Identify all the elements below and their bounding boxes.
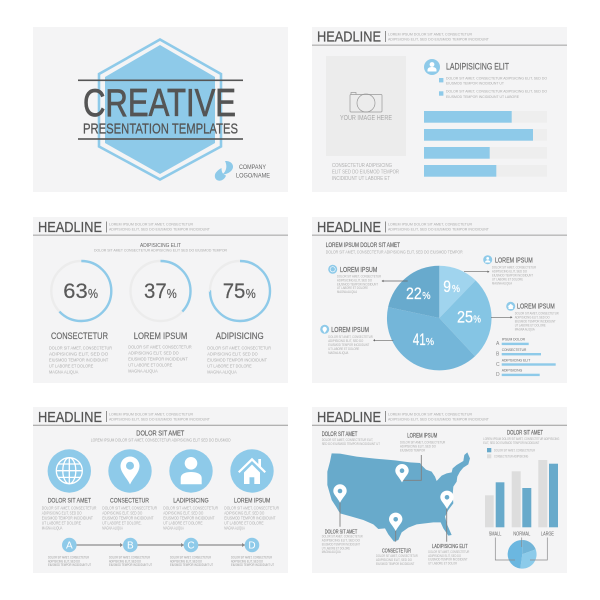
map pins: [333, 464, 454, 531]
header: [312, 219, 567, 236]
ring: 37 percent: [130, 261, 190, 321]
pie chart: %: [473, 314, 481, 326]
ring descriptions: MAGNA ALIQUA: [128, 368, 158, 374]
pie connector lines: [495, 538, 547, 560]
bar chart: [424, 111, 547, 177]
mini bar chart: B: [496, 352, 500, 358]
ring descriptions: MAGNA ALIQUA: [207, 370, 237, 374]
icon: camera: [350, 92, 382, 112]
column descriptions: EIUSMOD TEMPOR INCIDIDUNT: [102, 516, 154, 520]
column descriptions: EIUSMOD TEMPOR INCIDIDUNT: [42, 516, 93, 520]
ring descriptions: [49, 344, 272, 374]
company name: COMPANY: [239, 165, 266, 171]
callout: top left: LOREM IPSUM: [340, 267, 377, 274]
company name: LOGO/NAME: [236, 174, 270, 180]
ring labels: ADIPISICING: [216, 331, 264, 342]
timeline notes: [48, 556, 274, 567]
ring descriptions: UT LABORE ET DOLORE: [128, 362, 172, 368]
ring: 63 percent: 63: [63, 279, 88, 303]
timeline notes: DOLOR SIT AMET, CONSECTETUR: [231, 556, 272, 560]
map label: bottom centre: CONSECTETUR: [382, 548, 411, 554]
column chart: [485, 460, 558, 527]
map label: top left: SED DO EIUSMOD TEMPOR INCIDIDUNT UT: [322, 441, 380, 446]
timeline nodes: [62, 538, 259, 552]
map label: bottom right: [428, 544, 470, 566]
map label: bottom centre: [376, 548, 418, 566]
icon: person: [169, 449, 213, 493]
callout: top left: UT LABORE ET DOLORE: [337, 286, 368, 290]
callout: middle right: LOREM IPSUM: [517, 304, 555, 311]
callout: top left: DOLOR SIT AMET, CONSECTETUR: [337, 275, 381, 279]
callout: middle right: UT LABORE ET DOLORE: [515, 324, 546, 328]
title rule top: [78, 80, 243, 81]
map label: bottom right: EIUSMOD TEMPOR INCIDIDUNT: [428, 558, 468, 562]
chart heading: [483, 431, 559, 445]
bullet list: [439, 75, 547, 99]
icon: globe: [48, 449, 91, 493]
mini bar chart: ADIPISICING ELIT: [502, 358, 531, 362]
callout: top right: MAGNA ALIQUA: [492, 282, 512, 286]
section heading: ADIPISICING ELIT: [140, 243, 182, 249]
image caption: INCIDIDUNT UT LABORE ET: [332, 176, 391, 182]
panel: creative title slide: [33, 27, 288, 192]
subtitle: PRESENTATION TEMPLATES: [83, 122, 238, 138]
pie chart: %: [426, 336, 434, 348]
hexagon badge: [99, 40, 221, 180]
ring descriptions: UT LABORE ET DOLORE: [207, 364, 252, 368]
callout: top left: [328, 265, 408, 294]
header: [33, 219, 288, 236]
ring descriptions: DOLOR SIT AMET, CONSECTETUR: [128, 344, 192, 350]
icon: company logo: [215, 161, 233, 181]
ring descriptions: MAGNA ALIQUA: [49, 370, 78, 374]
icon: person: [424, 59, 440, 75]
map label: bottom centre: EIUSMOD TEMPOR INCIDIDUNT: [376, 562, 415, 566]
callout: bottom left: UT LABORE ET DOLORE: [328, 347, 360, 351]
timeline notes: ADIPISICING ELIT, SED DO: [48, 559, 80, 563]
header: [312, 28, 567, 46]
column labels: [48, 498, 271, 505]
header: ADIPISICING ELIT, SED DO EIUSMOD TEMPOR INCIDIDUNT: [388, 416, 489, 422]
timeline nodes: C: [187, 541, 195, 552]
timeline arrows: [76, 543, 245, 547]
callout: top left: MAGNA ALIQUA: [337, 290, 357, 294]
pie chart: 22: [406, 285, 422, 303]
ring: 63 percent: %: [88, 286, 98, 301]
column labels: LARGE: [541, 532, 554, 538]
map label: lower left: [322, 529, 363, 554]
pie chart: 41: [413, 331, 426, 349]
column descriptions: EIUSMOD TEMPOR INCIDIDUNT: [224, 516, 276, 520]
map label: lower left: MAGNA ALIQUA: [322, 550, 341, 554]
column labels: DOLOR SIT AMET: [48, 498, 91, 505]
ring labels: [51, 331, 264, 342]
timeline notes: ADIPISICING ELIT, SED DO: [109, 559, 141, 563]
callout: bottom left: EIUSMOD TEMPOR INCIDIDUNT: [328, 343, 370, 347]
column descriptions: MAGNA ALIQUA: [102, 526, 123, 530]
map connector lines: [340, 455, 447, 542]
chart heading: LOREM IPSUM DOLOR SIT AMET: [326, 243, 400, 249]
callout: middle right: ADIPISICING ELIT, SED DO: [515, 316, 550, 320]
timeline nodes: D: [248, 541, 256, 552]
timeline notes: EIUSMOD TEMPOR INCIDIDUNT UT: [231, 563, 274, 567]
section heading: LOREM IPSUM DOLOR SIT AMET, CONSECTETUR ADIPISICING ELIT SED DO EIUSMOD: [91, 437, 231, 442]
header: LOREM IPSUM DOLOR SIT AMET, CONSECTETUR: [109, 222, 193, 226]
column descriptions: ADIPISICING ELIT, SED DO: [224, 510, 265, 516]
image caption: ELIT SED DO EIUSMOD TEMPOR: [332, 170, 399, 176]
column descriptions: MAGNA ALIQUA: [42, 526, 62, 530]
column descriptions: MAGNA ALIQUA: [224, 526, 245, 530]
ring descriptions: EIUSMOD TEMPOR INCIDIDUNT: [49, 358, 109, 362]
pie chart: 9: [443, 278, 451, 296]
section heading: [91, 431, 231, 442]
column descriptions: UT LABORE ET DOLORE: [224, 520, 264, 526]
bullet list: EIUSMOD TEMPOR INCIDIDUNT UT LABORE: [446, 94, 519, 99]
chart legend: [487, 448, 535, 458]
callout: bottom left: [320, 325, 393, 355]
panel: map and columns slide: [312, 407, 567, 573]
panel: icons timeline slide: [33, 407, 288, 573]
panel: percentage rings slide: [33, 217, 288, 383]
ring: 75 percent: [210, 261, 270, 321]
title rule bottom: [78, 138, 243, 140]
callout: middle right: MAGNA ALIQUA: [515, 328, 535, 332]
ring descriptions: ADIPISICING ELIT, SED DO: [49, 352, 109, 356]
header: HEADLINE: [317, 219, 381, 236]
map label: top left: [322, 432, 380, 446]
map label: lower left: DOLOR SIT AMET, CONSECTETUR: [322, 534, 363, 538]
mini bar chart: ADIPISICING: [502, 369, 522, 373]
callout: top left: ADIPISICING ELIT, SED DO: [337, 278, 372, 282]
timeline notes: EIUSMOD TEMPOR INCIDIDUNT UT: [48, 563, 91, 567]
column descriptions: DOLOR SIT AMET, CONSECTETUR: [163, 506, 218, 510]
map label: bottom centre: ADIPISICING ELIT, SED DO: [376, 558, 412, 562]
column labels: [489, 532, 554, 538]
timeline nodes: A: [66, 541, 73, 552]
callout: bottom left: ADIPISICING ELIT, SED DO: [328, 339, 363, 343]
callout: top right: UT LABORE ET DOLORE: [492, 278, 523, 282]
column descriptions: [42, 506, 279, 530]
ring descriptions: ADIPISICING ELIT, SED DO: [207, 352, 258, 356]
map label: top centre: LOREM IPSUM: [407, 434, 437, 440]
chart legend: DOLOR SIT AMET, CONSECTETUR: [494, 448, 535, 452]
image caption: [332, 163, 399, 182]
chart heading: LOREM IPSUM DOLOR SIT AMET, CONSECTETUR ADIPISICING: [483, 436, 559, 441]
callout: middle right: [491, 302, 559, 332]
ring descriptions: DOLOR SIT AMET, CONSECTETUR: [49, 346, 113, 350]
map label: top left: DOLOR SIT AMET, CONSECTETUR ELIT,: [322, 437, 373, 442]
column descriptions: DOLOR SIT AMET, CONSECTETUR: [224, 506, 279, 510]
panel: pie chart slide: [312, 217, 567, 383]
map label: bottom right: LADIPISICING ELIT: [432, 544, 468, 550]
header: HEADLINE: [317, 409, 381, 426]
pie chart: %: [452, 283, 460, 295]
mini bar chart: D: [496, 372, 500, 378]
mini bar chart: C: [496, 362, 500, 368]
bullet list: EIUSMOD TEMPOR INCIDIDUNT UT: [446, 80, 504, 86]
chart heading: ELIT, SED DO EIUSMOD TEMPOR INCIDIDUNT: [483, 440, 540, 445]
icon: map pin: [108, 449, 152, 493]
column descriptions: UT LABORE ET DOLORE.: [102, 520, 142, 526]
title: creative: CREATIVE: [83, 82, 236, 125]
ring: 75 percent: %: [246, 286, 256, 301]
column descriptions: EIUSMOD TEMPOR INCIDIDUNT: [163, 516, 215, 520]
map label: lower left: ADIPISICING ELIT, SED DO: [322, 538, 360, 542]
column labels: LOREM IPSUM: [234, 498, 271, 505]
map label: top left: DOLOR SIT AMET: [322, 432, 358, 438]
timeline nodes: B: [127, 541, 134, 552]
ring: 37 percent: %: [167, 286, 177, 301]
section heading: DOLOR SIT AMET CONSECTETUR ADIPISICING ELIT SED DO EIUSMOD TEMPOR: [94, 248, 227, 252]
header: ADIPISICING ELIT, SED DO EIUSMOD TEMPOR INCIDIDUNT: [109, 416, 210, 422]
pie chart: [387, 266, 492, 370]
chart heading: DOLOR SIT AMET, CONSECTETUR ADIPISICING ELIT, SED DO EIUSMOD TEMPOR: [326, 250, 463, 254]
column descriptions: DOLOR SIT AMET, CONSECTETUR: [42, 506, 96, 510]
chart heading: [326, 243, 463, 254]
callout: top right: DOLOR SIT AMET, CONSECTETUR: [492, 266, 536, 270]
callout: top right: [464, 255, 536, 286]
header: LOREM IPSUM DOLOR SIT AMET, CONSECTETUR: [388, 412, 472, 416]
header: LOREM IPSUM DOLOR SIT AMET, CONSECTETUR: [388, 32, 472, 36]
chart legend: CONSECTETUR ADIPISICING: [494, 454, 528, 458]
image placeholder: [326, 56, 406, 156]
map label: top centre: DOLOR SIT AMET, CONSECTETUR: [400, 440, 446, 444]
image caption: CONSECTETUR ADIPISICING: [332, 163, 392, 169]
ring: 37 percent: 37: [144, 279, 167, 303]
bullet list: DOLOR SIT AMET, CONSECTETUR ADIPISICING ELIT, SED DO: [446, 88, 547, 94]
panel: image and bars slide: [312, 27, 567, 192]
callout: top right: LOREM IPSUM: [495, 257, 533, 264]
column descriptions: DOLOR SIT AMET, CONSECTETUR: [102, 506, 157, 510]
callout: bottom left: MAGNA ALIQUA: [328, 351, 349, 355]
timeline notes: ADIPISICING ELIT, SED DO: [231, 559, 263, 563]
mini bar chart: [496, 338, 556, 378]
map label: top centre: ADIPISICING ELIT, SED DO: [400, 444, 436, 448]
header: ADIPISICING ELIT, SED DO EIUSMOD TEMPOR INCIDIDUNT: [109, 226, 210, 232]
map label: bottom right: UT LABORE ET DOLOR: [428, 562, 457, 566]
timeline notes: DOLOR SIT AMET, CONSECTETUR: [170, 556, 211, 560]
ring labels: LOREM IPSUM: [134, 331, 187, 342]
timeline notes: ADIPISICING ELIT, SED DO: [170, 559, 202, 563]
section heading: DOLOR SIT AMET: [136, 431, 185, 438]
header: [312, 409, 567, 426]
ring: 75 percent: 75: [223, 279, 245, 303]
header: LOREM IPSUM DOLOR SIT AMET, CONSECTETUR: [388, 222, 472, 226]
callout: middle right: DOLOR SIT AMET, CONSECTETUR: [515, 312, 559, 316]
ring descriptions: UT LABORE ET DOLORE: [49, 364, 93, 368]
mini bar chart: IPSUM DOLOR: [502, 338, 525, 342]
callout: middle right: EIUSMOD TEMPOR INCIDIDUNT: [515, 320, 556, 324]
ring descriptions: DOLOR SIT AMET, CONSECTETUR: [207, 346, 272, 350]
ring: 63 percent: [51, 261, 111, 321]
header: HEADLINE: [38, 219, 102, 236]
map label: bottom right: DOLOR SIT AMET, CONSECTETUR: [428, 550, 470, 554]
column descriptions: ADIPISICING ELIT, SED DO: [42, 510, 82, 516]
header: HEADLINE: [317, 28, 381, 46]
map label: lower left: EIUSMOD TEMPOR INCIDIDUNT: [322, 542, 361, 546]
icon: house: [230, 449, 274, 493]
mini bar chart: CONSECTETUR: [502, 348, 527, 352]
map label: lower left: UT LABORE ET DOLORE: [322, 546, 350, 550]
ring descriptions: EIUSMOD TEMPOR INCIDIDUNT: [128, 356, 188, 362]
callout: top left: EIUSMOD TEMPOR INCIDIDUNT: [337, 282, 379, 286]
map label: top centre: [400, 434, 446, 452]
timeline notes: EIUSMOD TEMPOR INCIDIDUNT UT: [170, 563, 213, 567]
column labels: SMALL: [489, 532, 501, 538]
callout: top right: ADIPISICING ELIT, SED DO: [492, 270, 527, 274]
company name: [236, 165, 270, 180]
bullet list: DOLOR SIT AMET, CONSECTETUR ADIPISICING ELIT, SED DO: [446, 75, 547, 80]
column descriptions: UT LABORE ET DOLORE: [42, 520, 81, 526]
callout: bottom left: LOREM IPSUM: [331, 327, 369, 334]
map label: top centre: EIUSMOD TEMPOR: [400, 448, 426, 452]
column descriptions: UT LABORE ET DOLORE: [163, 520, 203, 526]
small pie chart: [508, 540, 537, 569]
header: [33, 409, 288, 426]
map label: bottom centre: DOLOR SIT AMET, CONSECTETUR: [376, 554, 418, 558]
timeline notes: EIUSMOD TEMPOR INCIDIDUNT UT: [109, 563, 152, 567]
callout: top right: EIUSMOD TEMPOR INCIDIDUNT: [492, 274, 534, 278]
pie chart: 25: [457, 309, 473, 327]
timeline notes: DOLOR SIT AMET, CONSECTETUR: [109, 556, 150, 560]
header: ADIPISICING ELIT, SED DO EIUSMOD TEMPOR INCIDIDUNT: [388, 36, 489, 42]
column descriptions: ADIPISICING ELIT, SED DO: [163, 510, 204, 516]
pie chart: %: [422, 290, 431, 302]
ring descriptions: ADIPISICING ELIT, SED DO: [128, 350, 179, 356]
column labels: LADIPISICING: [173, 498, 209, 505]
chart heading: DOLOR SIT AMET: [507, 431, 543, 437]
ring descriptions: EIUSMOD TEMPOR INCIDIDUNT: [207, 358, 267, 362]
column labels: CONSECTETUR: [110, 498, 149, 505]
map label: bottom right: ADIPISICING ELIT, SED DO: [428, 554, 461, 558]
subheading: LADIPISICING ELIT: [446, 62, 509, 72]
map label: lower left: DOLOR SIT AMET: [325, 529, 358, 535]
timeline notes: DOLOR SIT AMET, CONSECTETUR: [48, 556, 89, 560]
mini bar chart: A: [496, 341, 500, 347]
column labels: NORMAL: [513, 532, 530, 538]
header: ADIPISICING ELIT, SED DO EIUSMOD TEMPOR INCIDIDUNT: [388, 226, 489, 232]
section heading: [94, 243, 227, 252]
map: united states: [327, 452, 470, 542]
header: HEADLINE: [38, 409, 102, 426]
column descriptions: ADIPISICING ELIT, SED DO: [102, 510, 143, 516]
header: LOREM IPSUM DOLOR SIT AMET, CONSECTETUR: [109, 412, 193, 416]
image placeholder label: YOUR IMAGE HERE: [340, 115, 392, 122]
callout: bottom left: DOLOR SIT AMET, CONSECTETUR: [328, 335, 373, 339]
ring labels: CONSECTETUR: [51, 331, 108, 342]
column descriptions: MAGNA ALIQUA: [163, 526, 184, 530]
